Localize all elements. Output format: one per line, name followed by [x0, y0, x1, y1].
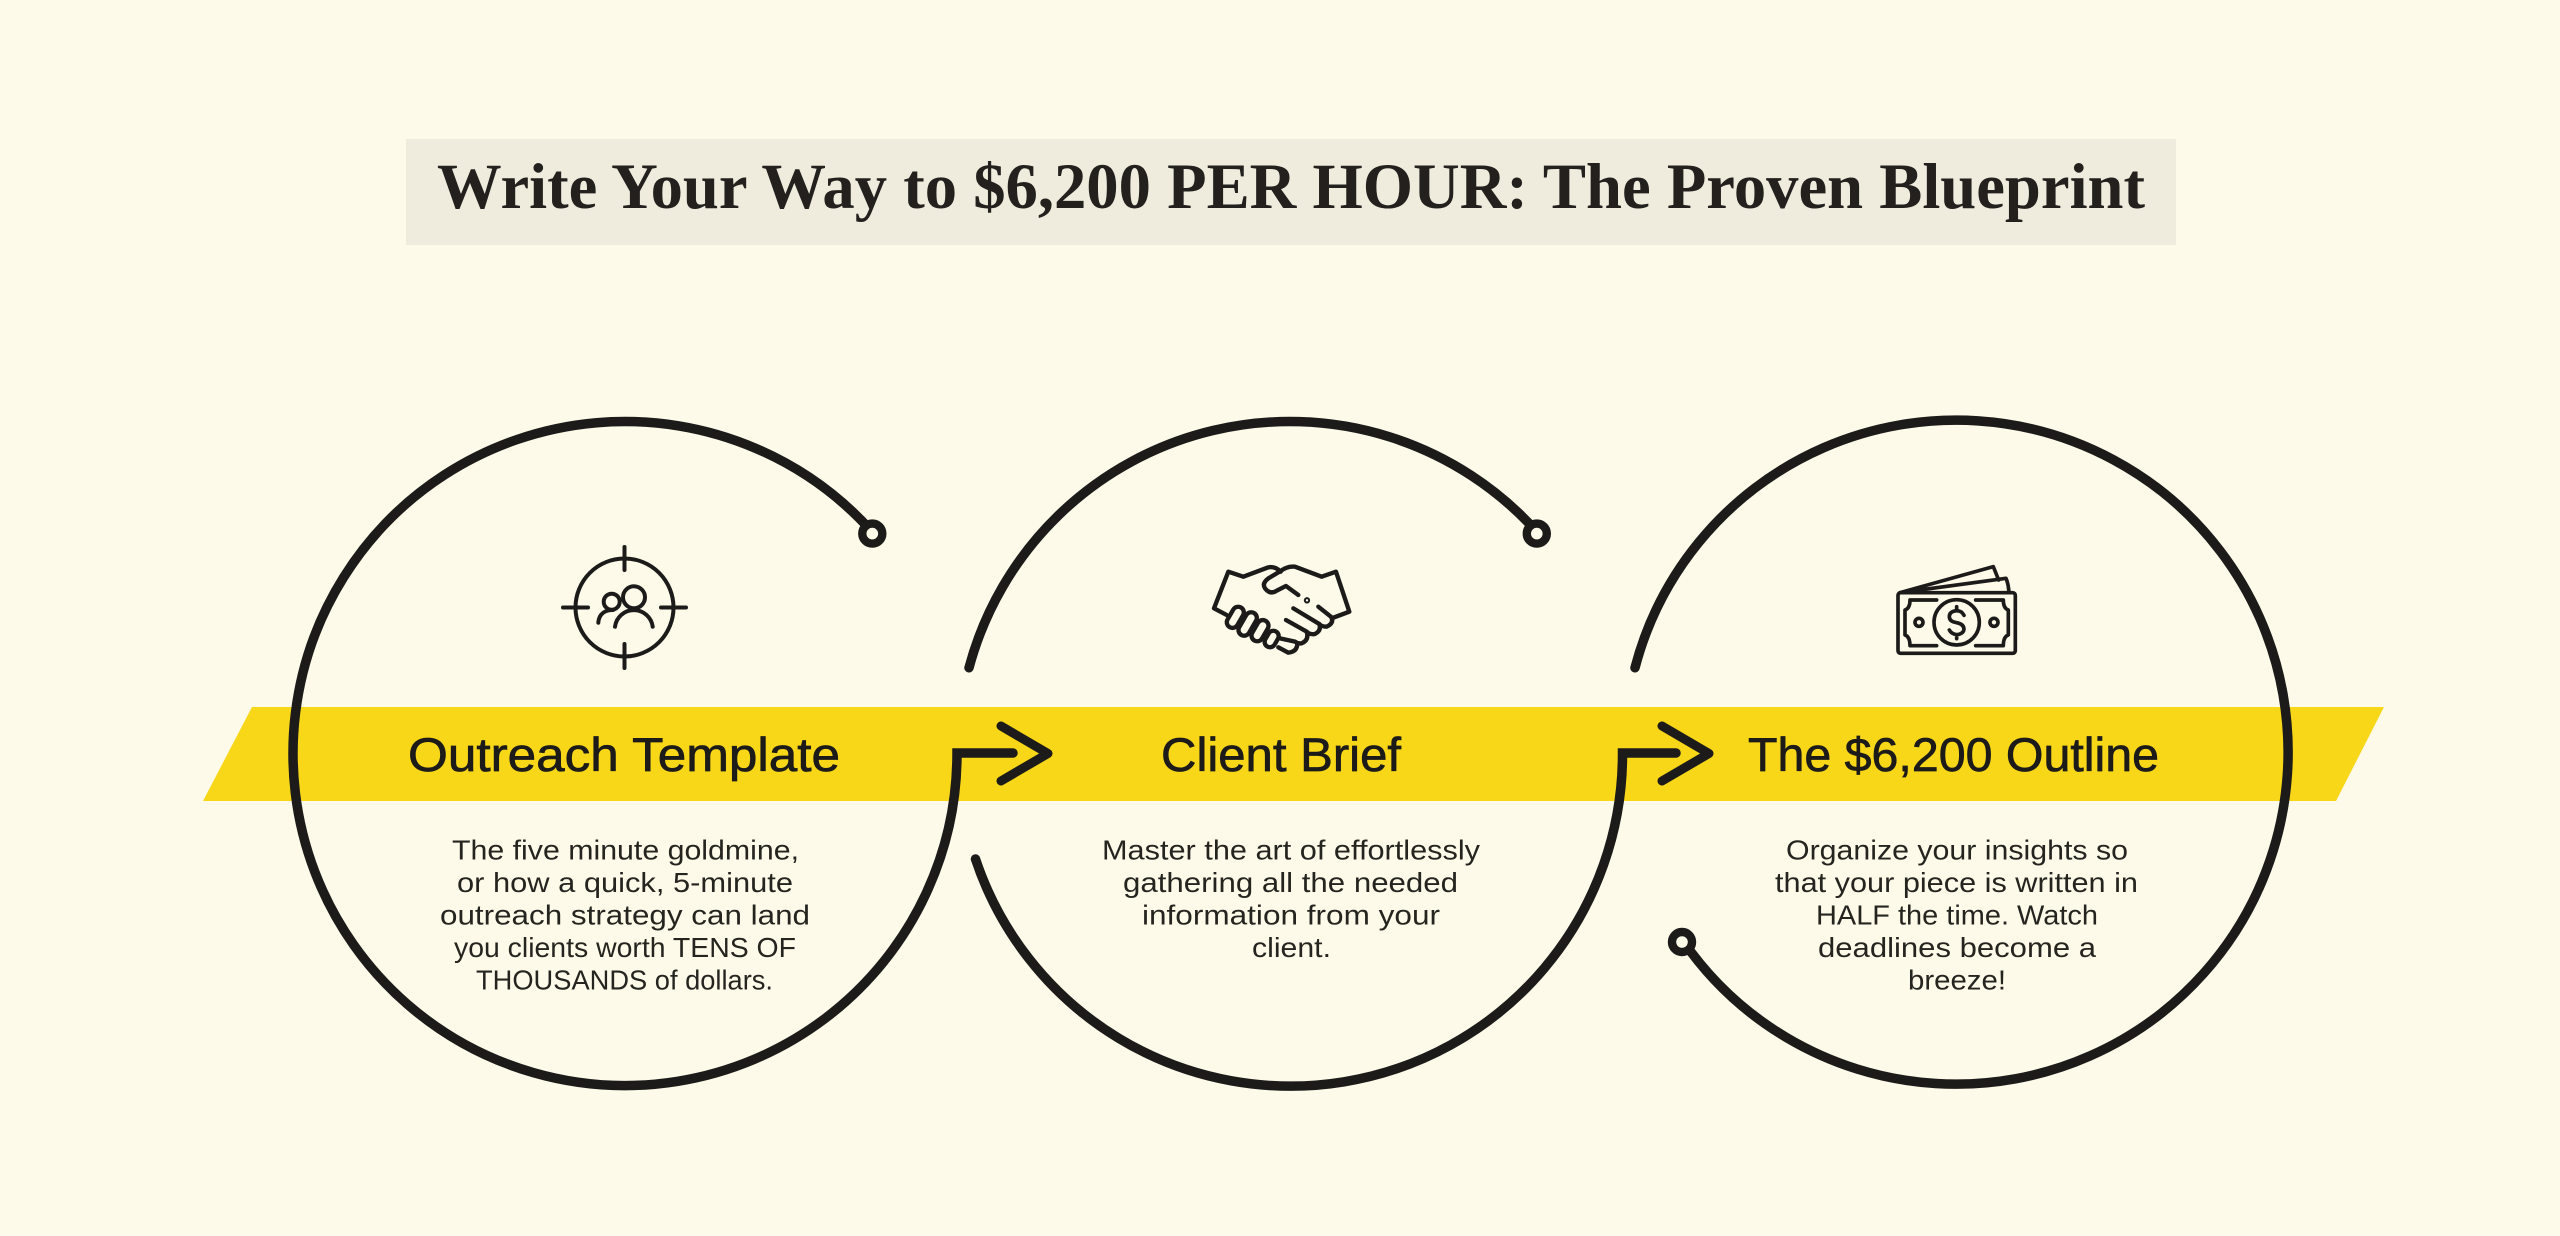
- text block: outreach description: or how a quick, 5-minute: [457, 867, 793, 898]
- heading: Outreach Template: Outreach Template: [408, 728, 840, 781]
- icon: handshake: [1214, 567, 1349, 653]
- icon: target with people: [563, 547, 686, 668]
- circle arc 3: [1635, 420, 2288, 1084]
- text block: client brief description: information from your: [1142, 900, 1440, 930]
- text block: outline description: that your piece is written in: [1775, 867, 2138, 898]
- text block: client brief description: [1102, 834, 1480, 963]
- text block: outreach description: The five minute goldmine,: [452, 834, 799, 866]
- text block: outline description: HALF the time. Watch: [1816, 900, 2098, 930]
- text block: client brief description: Master the art of effortlessly: [1102, 834, 1480, 866]
- heading: The $6,200 Outline: The $6,200 Outline: [1748, 728, 2159, 781]
- text block: client brief description: client.: [1252, 932, 1331, 963]
- heading: Client Brief: Client Brief: [1161, 728, 1402, 781]
- icon: banknotes: [1898, 567, 2015, 653]
- text block: outline description: Organize your insights so: [1786, 834, 2128, 866]
- yellow ribbon band: [203, 707, 2384, 801]
- text block: outline description: breeze!: [1908, 964, 2006, 996]
- text block: outline description: [1775, 834, 2138, 996]
- circle arrow 1: [293, 422, 1048, 1086]
- text block: outline description: deadlines become a: [1818, 932, 2096, 963]
- text block: outreach description: you clients worth TENS OF: [454, 932, 796, 963]
- title text: Write Your Way to $6,200 PER HOUR: The Proven Blueprint: [437, 151, 2145, 223]
- text block: client brief description: gathering all the needed: [1123, 867, 1458, 898]
- text block: outreach description: [440, 834, 810, 996]
- circle arrow 2: [969, 422, 1709, 1086]
- text block: outreach description: THOUSANDS of dollars.: [476, 964, 773, 996]
- title banner: [406, 139, 2176, 245]
- text block: outreach description: outreach strategy can land: [440, 900, 810, 930]
